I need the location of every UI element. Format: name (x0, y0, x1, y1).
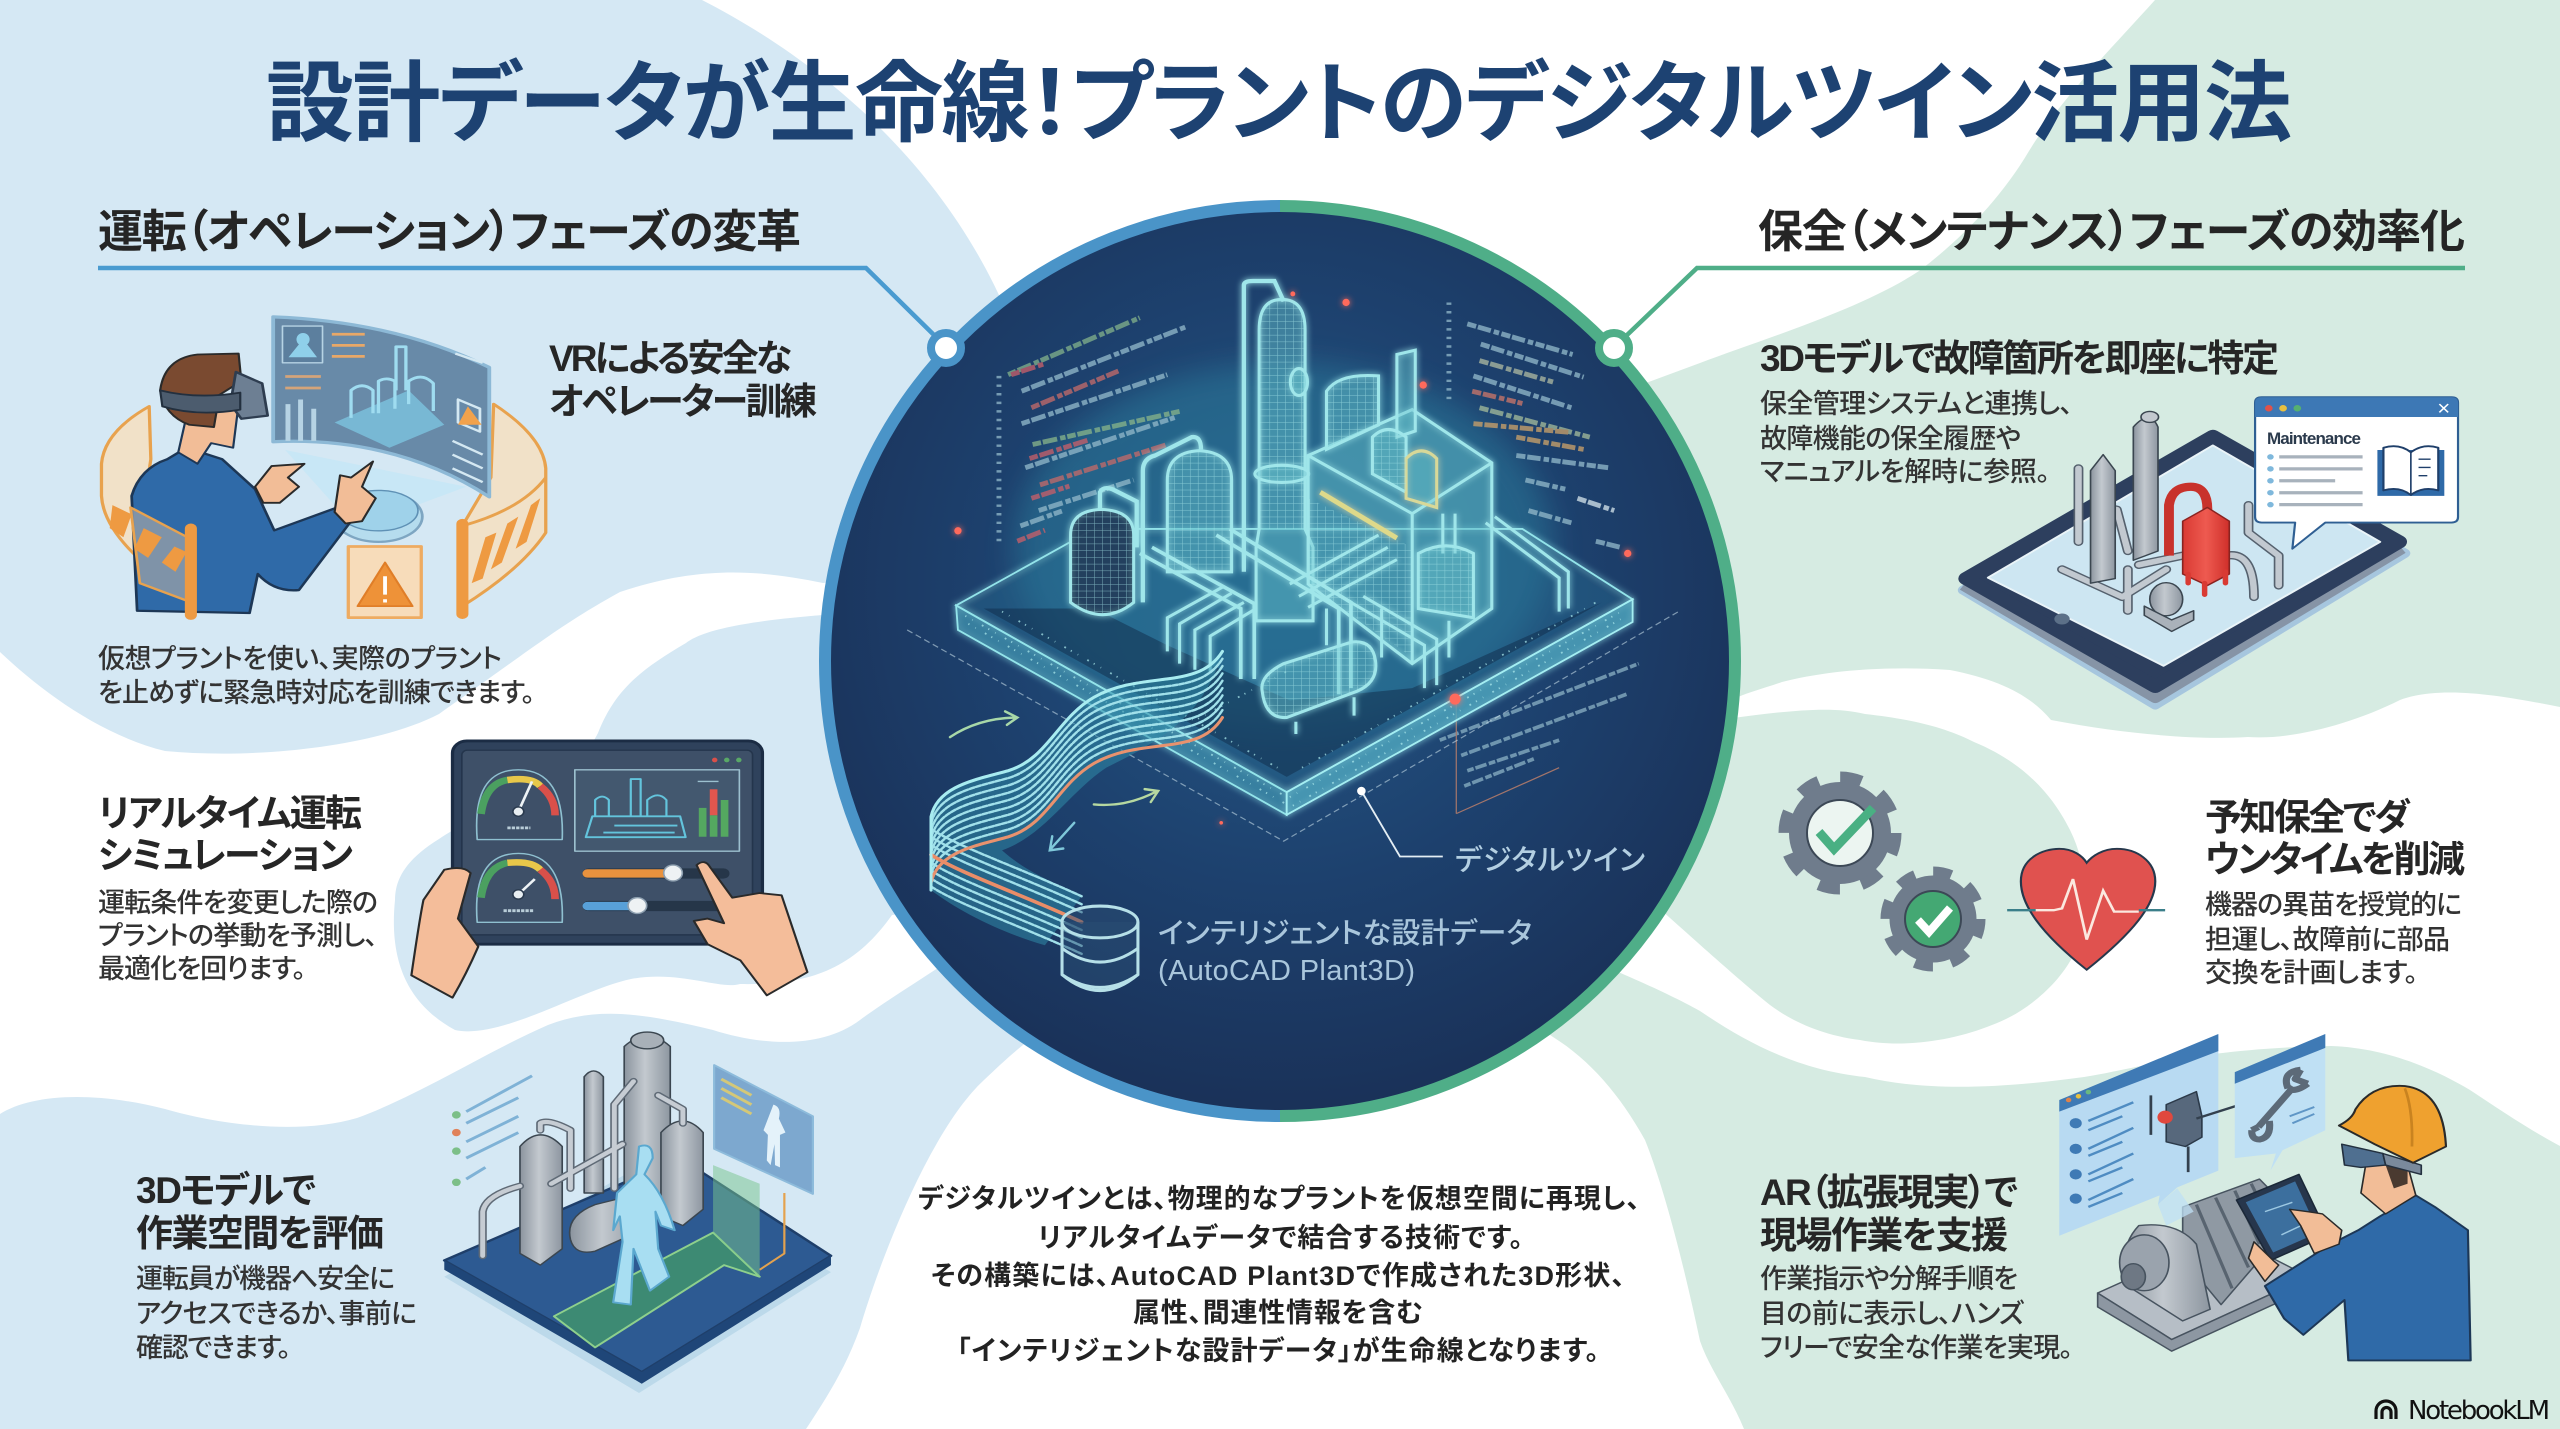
gauges (477, 770, 562, 922)
code lines lower right (1440, 664, 1639, 814)
worker (2265, 1195, 2471, 1360)
icon: gears with checks (1786, 779, 1979, 965)
text: real-time description (98, 888, 378, 984)
label: autocad plant3d: (AutoCAD Plant3D) (1158, 955, 1415, 987)
connector: operation rule to hub (98, 268, 935, 336)
safety barriers (101, 404, 546, 606)
heading: 3D workspace: 3Dモデルで (136, 1169, 316, 1211)
heading: predictive maintenance: ウンタイムを削減 (2205, 839, 2465, 880)
illustration: VR training (101, 317, 546, 620)
tower (1256, 299, 1313, 621)
text: predictive description (2205, 890, 2462, 988)
label: intelligent design data: インテリジェントな設計データ (1158, 917, 1532, 950)
label: digital twin: デジタルツイン (1455, 844, 1645, 877)
motor on base (2098, 1235, 2309, 1340)
heading: 3D workspace: 作業空間を評価 (136, 1213, 384, 1254)
holographic screen (273, 317, 489, 497)
info panel right (714, 1065, 813, 1194)
text: 3D workspace description: 確認できます。 (136, 1333, 291, 1363)
illustration: workspace evaluation (444, 1032, 831, 1393)
AR panel right (2235, 1034, 2325, 1171)
dark floor with speckles (984, 602, 1602, 777)
heading: fault identification: 3Dモデルで故障箇所を即座に特定 (1760, 337, 2279, 379)
operator body (132, 448, 351, 613)
icon: heart with pulse (2007, 849, 2165, 970)
text: 3D workspace description: 運転員が機器へ安全に (136, 1264, 395, 1294)
text: VR training description (98, 644, 535, 708)
platform (956, 529, 1633, 815)
horizontal drum (1262, 642, 1376, 718)
logo: NotebookLM: NotebookLM (2408, 1396, 2550, 1426)
text: central explanation: 「インテリジェントな設計データ」が生命線となります。 (957, 1335, 1599, 1366)
structure right (1308, 410, 1492, 664)
text: real-time description: 運転条件を変更した際の (98, 888, 378, 918)
text: VR training description: を止めずに緊急時対応を訓練できます。 (98, 678, 535, 708)
text: fault identification description: 故障機能の保全履歴や (1760, 424, 2021, 454)
hologram walker (613, 1145, 675, 1305)
heading: predictive maintenance: 予知保全でダ (2205, 797, 2411, 838)
heading: predictive maintenance (2205, 797, 2465, 880)
AR valve (2166, 1092, 2202, 1146)
wrench (2252, 1070, 2308, 1140)
background: green maintenance area (1500, 0, 2560, 1429)
warning sign (348, 546, 421, 618)
translucent barrier in front of operator (131, 507, 189, 602)
twin callout pointer (1357, 787, 1443, 856)
heading: AR support (1760, 1172, 2018, 1256)
heading: VR training (549, 338, 817, 422)
illustration: maintenance tablet (1963, 397, 2458, 705)
red sparks (954, 291, 1631, 825)
text: fault identification description: 保全管理システムと連携し、 (1760, 389, 2073, 419)
tank B (1167, 451, 1232, 572)
code lines left (999, 318, 1186, 547)
plant vessels and piping (1071, 281, 1568, 734)
heading: 3D workspace (136, 1169, 384, 1254)
background: blue operation area (0, 0, 1060, 1429)
dashed ground outline (907, 612, 1679, 841)
connector node: left (931, 333, 961, 363)
handheld tablet (2236, 1174, 2328, 1260)
soft glow behind plant (1014, 364, 1553, 731)
text: real-time description: プラントの挙動を予測し、 (98, 921, 378, 951)
text: central explanation: 属性、間連性情報を含む (1133, 1298, 1423, 1328)
heading: real-time simulation (98, 793, 362, 876)
heading: maintenance phase: 保全（メンテナンス）フェーズの効率化 (1758, 206, 2465, 257)
illustration: real-time tablet (411, 741, 807, 998)
operator head and hands (178, 404, 239, 464)
text: predictive description: 交換を計画します。 (2205, 958, 2418, 988)
text: central explanation: デジタルツインとは、物理的なプラントを仮想空間に再現し、 (918, 1183, 1640, 1214)
text: central explanation: その構築には、AutoCAD Plant3Dで作成された3D形状、 (931, 1261, 1625, 1291)
sliders (583, 868, 730, 879)
data ribbon (931, 651, 1222, 954)
text: AR description: 作業指示や分解手順を (1760, 1264, 2018, 1294)
heading: operation phase: 運転（オペレーション）フェーズの変革 (98, 206, 801, 257)
text: predictive description: 機器の異苗を授覚的に (2205, 890, 2462, 920)
database icon (1062, 906, 1138, 991)
data flow arrows (950, 711, 1158, 850)
maintenance popup (2255, 397, 2458, 549)
AR panel left (2059, 1035, 2218, 1236)
pipe rack (1216, 529, 1351, 694)
text: 3D workspace description: アクセスできるか、事前に (136, 1299, 417, 1329)
text: real-time description: 最適化を回ります。 (98, 954, 306, 984)
heading: real-time simulation: シミュレーション (98, 835, 353, 876)
light beam and projector disc (285, 450, 466, 505)
text: AR description: フリーで安全な作業を実現。 (1760, 1333, 2073, 1363)
text: central explanation (918, 1183, 1640, 1366)
vessel mesh texture (1071, 299, 1473, 718)
heading: AR support: AR（拡張現実）で (1760, 1172, 2018, 1213)
connector node: right (1599, 333, 1629, 363)
connector: maintenance rule to hub (1626, 268, 2465, 336)
heading: VR training: VRによる安全な (549, 338, 792, 379)
title: 設計データが生命線！プラントのデジタルツイン活用法 (266, 54, 2292, 153)
beam from motor to panel (2158, 1188, 2194, 1226)
text: VR training description: 仮想プラントを使い、実際のプラント (98, 644, 502, 674)
text: central explanation: リアルタイムデータで結合する技術です。 (1038, 1222, 1523, 1253)
book icon (2377, 450, 2444, 496)
tank A (1071, 509, 1134, 615)
text: 3D workspace description (136, 1264, 417, 1363)
vessels (520, 1032, 703, 1265)
code lines right (1449, 302, 1620, 547)
info lines left (466, 1076, 532, 1179)
text: fault identification description (1760, 389, 2073, 487)
hands (411, 868, 478, 998)
heading: VR training: オペレーター訓練 (549, 381, 817, 422)
text: AR description: 目の前に表示し、ハンズ (1760, 1299, 2024, 1329)
text: AR description (1760, 1264, 2073, 1363)
central digital twin circle (825, 206, 1735, 1116)
illustration: AR field work (2059, 1034, 2471, 1360)
plant on tablet (2062, 468, 2279, 611)
text: fault identification description: マニュアルを解時に参照。 (1760, 457, 2050, 487)
heading: real-time simulation: リアルタイム運転 (98, 793, 362, 834)
plant chart panel (575, 770, 739, 851)
label: maintenance: Maintenance (2267, 429, 2361, 448)
central illustration (907, 281, 1679, 991)
green walkway (554, 1233, 760, 1347)
text: predictive description: 担運し、故障前に部品 (2205, 925, 2450, 955)
heading: AR support: 現場作業を支援 (1760, 1215, 2008, 1256)
